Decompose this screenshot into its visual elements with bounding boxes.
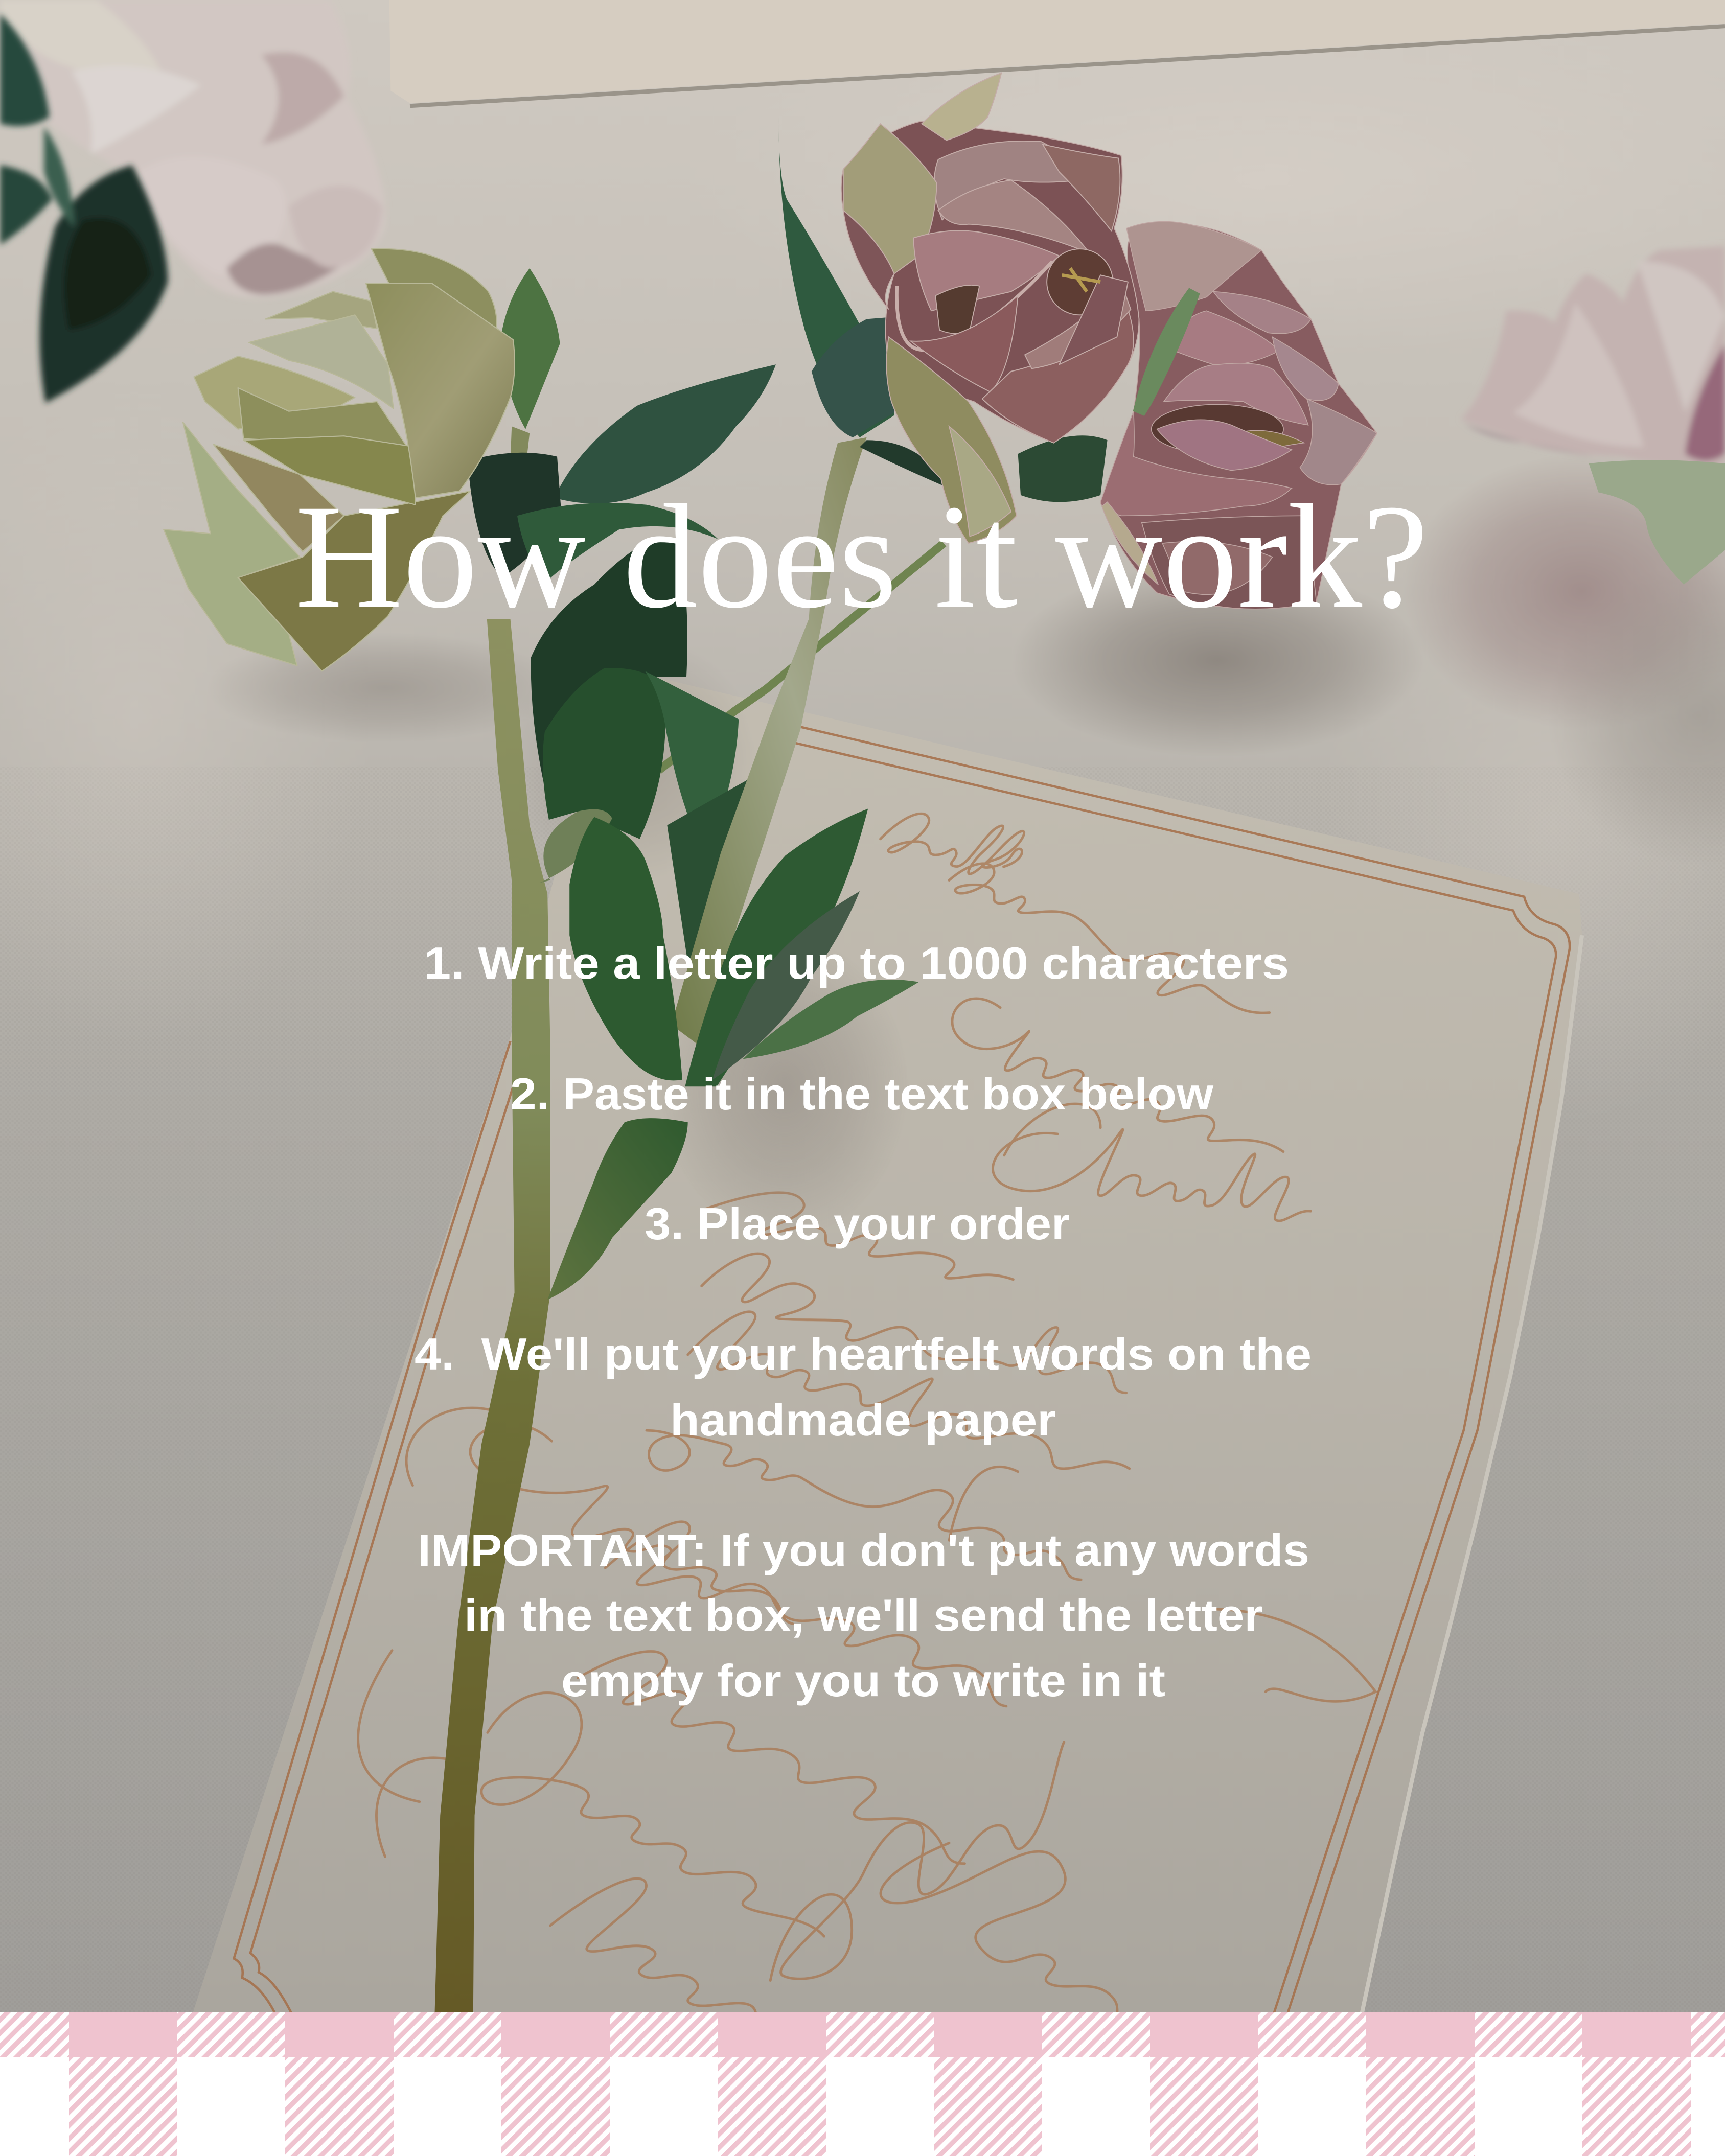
handwritten calligraphy strokes: [358, 779, 1375, 2052]
top back petal: [372, 249, 497, 330]
bright small leaf: [517, 503, 718, 585]
important note: IMPORTANT: If you don't put any words: [418, 1525, 1309, 1575]
mauve flower two: [1100, 222, 1377, 609]
step 1: 1. Write a letter up to 1000 characters: [424, 938, 1289, 988]
right serrated leaf: [685, 809, 868, 1086]
pale green sepal: [1589, 460, 1725, 585]
yellow stamens: [1062, 268, 1100, 292]
main front petal: [366, 283, 515, 498]
step 4: 4. We'll put your heartfelt words on the: [415, 1329, 1312, 1379]
pale lower-left petals: [164, 422, 300, 666]
pale tip leaf: [743, 980, 919, 1059]
upper petals: [265, 292, 377, 329]
green sepal: [1139, 292, 1194, 412]
letter double border: [234, 722, 1570, 2013]
shadows under stems and leaves: [509, 633, 908, 1238]
grey-green leaf: [712, 891, 860, 1080]
step 3: 3. Place your order: [645, 1198, 1070, 1249]
flower one base: [841, 121, 1139, 443]
thin stem to the right: [659, 543, 944, 770]
green hellebore flower: [164, 249, 515, 671]
lower leaves cluster: [547, 809, 919, 1300]
dark leaf: [468, 453, 561, 577]
upper leaves behind stem: [468, 268, 776, 812]
swirl petal: [913, 230, 1059, 311]
main stem: [434, 619, 550, 2013]
pale left petal: [843, 124, 937, 274]
important note: [418, 1525, 1309, 1706]
mauve flower one: [841, 73, 1139, 543]
vertical centre leaf: [569, 817, 682, 1080]
brown lower petal: [238, 491, 470, 671]
olive middle petal: [243, 436, 416, 505]
green leaf at upper right of stem: [778, 117, 1108, 502]
calligraphy letter paper: [193, 667, 1582, 2052]
dark leaves top left: [0, 14, 168, 403]
right ruffled petals: [982, 310, 1134, 443]
tan top petal: [922, 73, 1001, 141]
long green leaf: [555, 364, 776, 504]
surface light and shadow: [0, 0, 1725, 1128]
pale pink flower on right: [1461, 246, 1725, 468]
blurred pale flower top left: [0, 0, 386, 298]
envelope strip at top: [389, 0, 1725, 106]
drooping pale petal: [886, 337, 1017, 543]
important note: in the text box, we'll send the letter: [464, 1590, 1263, 1640]
lower stem leaf: [547, 1118, 688, 1300]
small upright leaf: [502, 268, 560, 429]
second stem rising to mauve flower: [671, 437, 867, 1045]
flower two dark centre: [1152, 404, 1283, 454]
step 2: 2. Paste it in the text box below: [510, 1069, 1214, 1119]
large dark leaf under title: [531, 538, 687, 812]
title: How does it work?: [295, 474, 1429, 639]
step 4: handmade paper: [670, 1395, 1056, 1445]
important note: empty for you to write in it: [561, 1655, 1165, 1706]
step 4: [415, 1329, 1312, 1445]
flower two base: [1102, 224, 1377, 609]
left bud petal: [194, 356, 355, 429]
curling leaf: [539, 668, 765, 963]
instructions text block: [415, 938, 1312, 1706]
pink gingham footer band: [0, 2012, 1725, 2156]
